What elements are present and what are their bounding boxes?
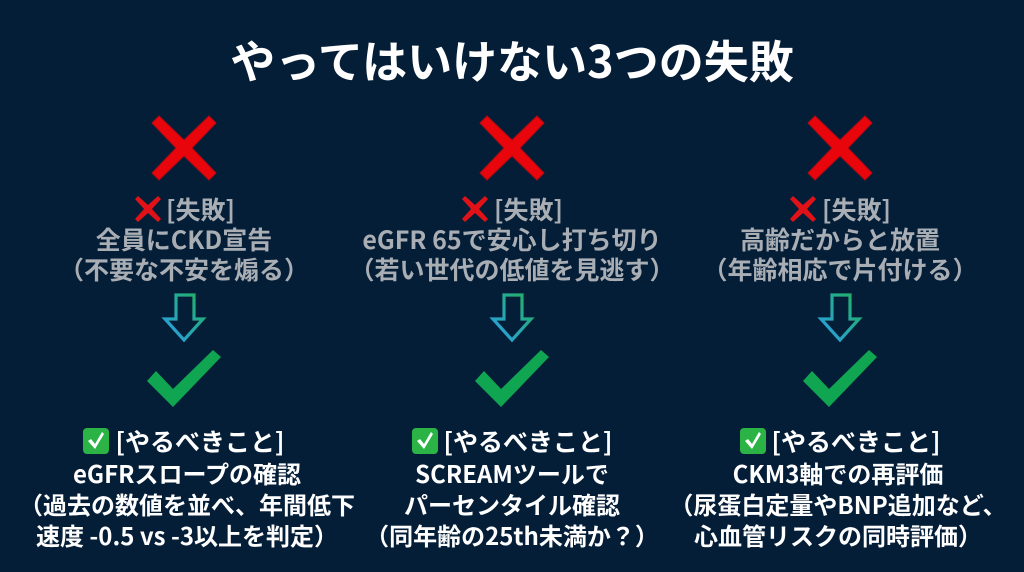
failure text 3: [失敗]	[822, 191, 891, 227]
failure text 2: eGFR 65で安心し打ち切り	[362, 221, 662, 257]
action text 1: [やるべきこと]	[116, 423, 284, 459]
failure text 1	[59, 191, 309, 287]
action text 3	[669, 423, 1007, 552]
action text 1: （過去の数値を並べ、年間低下	[19, 486, 355, 521]
icons column 2	[412, 116, 549, 454]
icons column 1	[83, 116, 221, 454]
action text 3: CKM3軸での再評価	[733, 455, 943, 490]
action text 1: eGFRスロープの確認	[73, 455, 301, 490]
failure text 1: （不要な不安を煽る）	[59, 251, 309, 287]
action text 1: 速度 -0.5 vs -3以上を判定）	[36, 517, 338, 552]
large icons and arrows	[83, 115, 877, 454]
failure text 2	[349, 191, 675, 287]
failure text 2: [失敗]	[494, 191, 563, 227]
action text 2: [やるべきこと]	[444, 423, 612, 459]
action text 2: SCREAMツールで	[415, 455, 609, 490]
action text 1	[19, 423, 355, 552]
icons layer	[83, 115, 877, 454]
failure text 1: [失敗]	[166, 191, 235, 227]
failure text 2: （若い世代の低値を見逃す）	[349, 251, 675, 287]
icons column 3	[740, 116, 877, 454]
action text 3: [やるべきこと]	[772, 423, 940, 459]
failure text 3: （年齢相応で片付ける）	[702, 251, 978, 287]
failure text 3	[702, 191, 978, 287]
title: やってはいけない3つの失敗	[230, 26, 794, 91]
action text 3: （尿蛋白定量やBNP追加など、	[669, 486, 1007, 521]
failure text 1: 全員にCKD宣告	[96, 221, 272, 257]
action text 3: 心血管リスクの同時評価）	[694, 517, 982, 552]
failure text 3: 高齢だからと放置	[740, 221, 940, 257]
action text 2: パーセンタイル確認	[404, 486, 620, 521]
action text 2: （同年齢の25th未満か？）	[365, 517, 659, 552]
action text 2	[365, 423, 659, 552]
